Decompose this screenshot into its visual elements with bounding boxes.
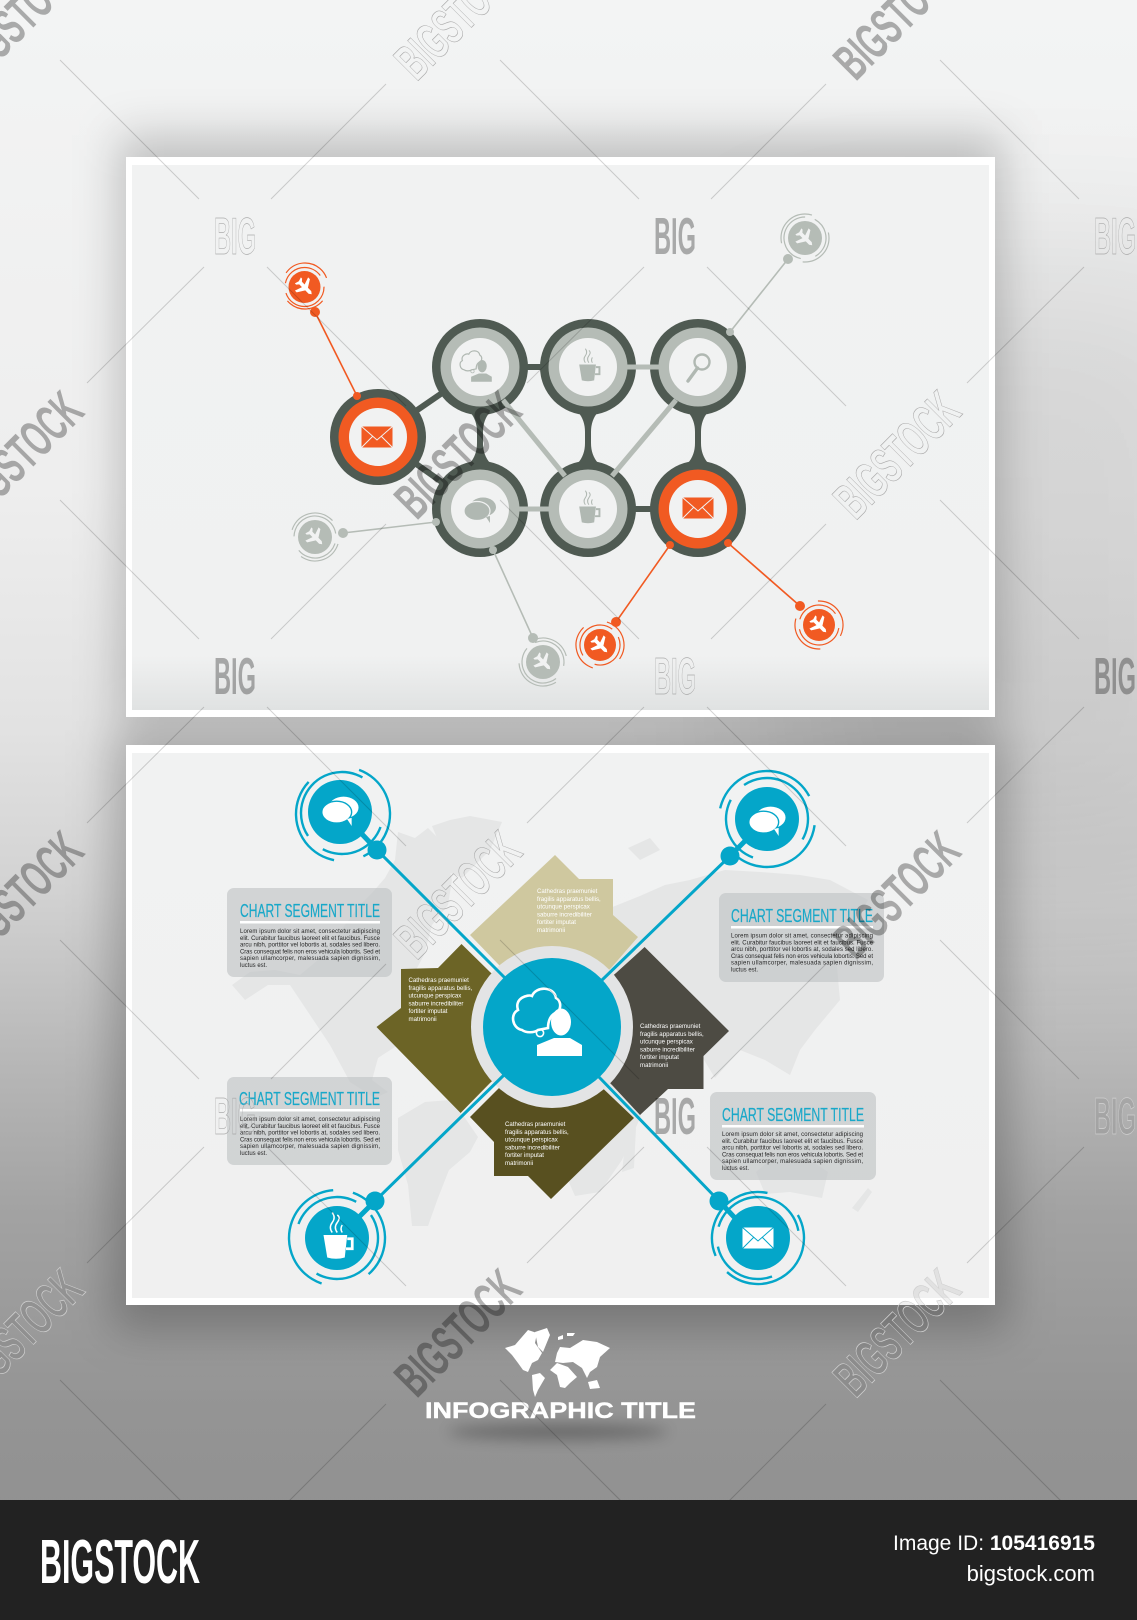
panel: segment chart	[126, 745, 995, 1305]
icon: envelope right	[682, 497, 714, 519]
watermark BIGSTOCK labels: BIGSTOCK	[384, 381, 533, 530]
text box bottom left: Lorem ipsum dolor sit amet, consectetur adipiscing	[240, 1117, 380, 1123]
orange pin bottom	[567, 541, 674, 678]
text box bottom right	[710, 1092, 876, 1180]
grey pin bottom	[489, 546, 574, 693]
image id: Image ID: 105416915	[893, 1532, 1095, 1555]
text box bottom right: CHART SEGMENT TITLE	[722, 1105, 864, 1125]
icon: cup bottom	[579, 491, 599, 523]
watermark BIGSTOCK labels	[0, 0, 972, 1408]
site address: bigstock.com	[967, 1561, 1095, 1586]
inner discs	[349, 338, 727, 538]
segment text left: saburre incredibiliter	[408, 1000, 463, 1007]
segment text right: Cathedras praemuniet	[640, 1023, 701, 1030]
text box bottom right: Cras consequat felis non eros vehicula lobortis. Sed et	[722, 1152, 863, 1158]
watermark BIG labels: BIG	[214, 648, 256, 706]
watermark BIG labels: BIG	[654, 1088, 696, 1146]
text box bottom right: elit. Curabitur faucibus laoreet elit et faucibus. Fusce	[722, 1139, 864, 1145]
segment text left: matrimonii	[408, 1016, 437, 1023]
watermark BIGSTOCK labels: BIGSTOCK	[823, 1259, 972, 1408]
connectors between circles	[378, 364, 708, 512]
segment top tan	[470, 855, 638, 1027]
segment text left: fragilis apparatus bellis,	[408, 985, 472, 992]
icon: magnifier	[688, 354, 710, 381]
segment text right	[640, 1023, 704, 1069]
text box bottom right: arcu nibh, porttitor vel lobortis at, sodales sed libero.	[722, 1146, 863, 1152]
segment text top: fragilis apparatus bellis,	[537, 896, 601, 903]
segment text right: matrimonii	[640, 1062, 668, 1069]
segment bottom brown	[470, 1027, 634, 1199]
text box top right	[719, 893, 884, 982]
text box bottom left: elit. Curabitur faucibus laoreet elit et faucibus. Fusce	[240, 1124, 381, 1130]
blue pin bottom right	[695, 1175, 821, 1301]
panel shadows	[112, 135, 1009, 1330]
segment text top: matrimonii	[537, 927, 565, 934]
infographic title: INFOGRAPHIC TITLE	[425, 1398, 696, 1423]
watermark BIG labels: BIG	[214, 208, 256, 266]
grey pin top right	[726, 209, 834, 336]
text box bottom right: sapien ullamcorper, malesuada sapien dignissim,	[722, 1159, 863, 1165]
text box top left: elit. Curabitur faucibus laoreet elit et faucibus. Fusce	[240, 936, 381, 942]
text box top right: luctus est.	[731, 968, 758, 974]
text box top left: Lorem ipsum dolor sit amet, consectetur adipiscing	[240, 929, 380, 935]
segment text bottom: matrimonii	[505, 1160, 533, 1167]
segment text right: saburre incredibiliter	[640, 1046, 695, 1053]
text box top right: CHART SEGMENT TITLE	[731, 906, 873, 926]
title block	[425, 1328, 696, 1440]
segment text right: fortiter imputat	[640, 1054, 679, 1061]
connector lines	[375, 850, 730, 1201]
text box bottom left: sapien ullamcorper, malesuada sapien dignissim,	[240, 1144, 380, 1150]
segment text right: utcunque perspicax	[640, 1039, 693, 1046]
watermark BIG labels: BIG	[214, 1088, 256, 1146]
segment text bottom: saburre incredibiliter	[505, 1144, 560, 1151]
segment text top	[537, 888, 601, 934]
inner rings	[338, 328, 738, 548]
text box top right: arcu nibh, porttitor vel lobortis at, sodales sed libero.	[731, 947, 873, 953]
text box top right: Lorem ipsum dolor sit amet, consectetur adipiscing	[731, 934, 873, 940]
watermark BIGSTOCK labels: BIGSTOCK	[384, 821, 533, 970]
grey pin left	[282, 504, 440, 570]
panel frame	[126, 745, 995, 1305]
text box top right: elit. Curabitur faucibus laoreet elit et faucibus. Fusce	[731, 940, 874, 946]
blue pin bottom left	[275, 1176, 399, 1300]
segment text left: Cathedras praemuniet	[408, 977, 469, 984]
watermark BIG labels: BIG	[654, 648, 696, 706]
segment text left	[408, 977, 472, 1023]
centre disc	[483, 958, 621, 1096]
icon: world map	[505, 1328, 610, 1397]
segment text bottom: Cathedras praemuniet	[505, 1121, 566, 1128]
footer bar	[0, 1500, 1137, 1620]
world map backdrop	[232, 816, 872, 1226]
text box bottom left: arcu nibh, porttitor vel lobortis at, sodales sed libero.	[240, 1131, 380, 1137]
icon: thinker centre	[513, 989, 582, 1056]
outer circle rings	[330, 319, 746, 557]
grey links	[503, 367, 676, 509]
segment left olive	[376, 944, 552, 1113]
icon: envelope left	[361, 426, 393, 448]
panel frame	[126, 157, 995, 717]
segment text top: fortiter imputat	[537, 919, 576, 926]
segment text right: fragilis apparatus bellis,	[640, 1031, 704, 1038]
text box top right: Cras consequat felis non eros vehicula lobortis. Sed et	[731, 954, 873, 960]
text box bottom right: Lorem ipsum dolor sit amet, consectetur adipiscing	[722, 1132, 863, 1138]
panel: network diagram	[126, 157, 995, 717]
watermark BIGSTOCK labels: BIGSTOCK	[384, 1259, 533, 1408]
segment text bottom: utcunque perspicax	[505, 1137, 558, 1144]
text box bottom left: luctus est.	[240, 1151, 267, 1157]
watermark BIGSTOCK labels: BIGSTOCK	[823, 381, 972, 530]
icon: speech bubbles	[464, 498, 496, 523]
text box top left: arcu nibh, porttitor vel lobortis at, sodales sed libero.	[240, 943, 380, 949]
icon: person with cloud	[460, 351, 492, 382]
segment text top: utcunque perspicax	[537, 904, 590, 911]
segment text bottom: fragilis apparatus bellis,	[505, 1129, 569, 1136]
text box bottom left: CHART SEGMENT TITLE	[239, 1089, 380, 1109]
orange pin right	[724, 539, 847, 653]
centre ring	[471, 946, 633, 1108]
watermark BIG labels: BIG	[654, 208, 696, 266]
orange pin top left	[273, 254, 361, 400]
text box top right: sapien ullamcorper, malesuada sapien dignissim,	[731, 961, 873, 967]
text box top left: Cras consequat felis non eros vehicula lobortis. Sed et	[240, 949, 380, 955]
text box top left: CHART SEGMENT TITLE	[240, 901, 380, 921]
segment text bottom	[505, 1121, 569, 1167]
text box top left: sapien ullamcorper, malesuada sapien dignissim,	[240, 956, 380, 962]
text box top left	[227, 888, 392, 977]
watermark BIG labels	[214, 208, 1136, 1146]
watermark BIGSTOCK labels: BIGSTOCK	[823, 821, 972, 970]
segment text top: saburre incredibiliter	[537, 911, 592, 918]
text box bottom right: luctus est.	[722, 1166, 749, 1172]
segment text left: fortiter imputat	[408, 1008, 448, 1015]
text box bottom left: Cras consequat felis non eros vehicula lobortis. Sed et	[240, 1137, 380, 1143]
blue pin top left	[283, 754, 403, 874]
segment right dark	[552, 947, 729, 1115]
icon: cup top	[579, 349, 599, 381]
blue pin top right	[705, 757, 829, 881]
segment text bottom: fortiter imputat	[505, 1152, 544, 1159]
title shadow	[448, 1424, 668, 1440]
segment text left: utcunque perspicax	[408, 993, 461, 1000]
text box top left: luctus est.	[240, 963, 267, 969]
text box bottom left	[227, 1077, 392, 1165]
footer bar: BIGSTOCK	[40, 1528, 200, 1597]
segment text top: Cathedras praemuniet	[537, 888, 598, 895]
